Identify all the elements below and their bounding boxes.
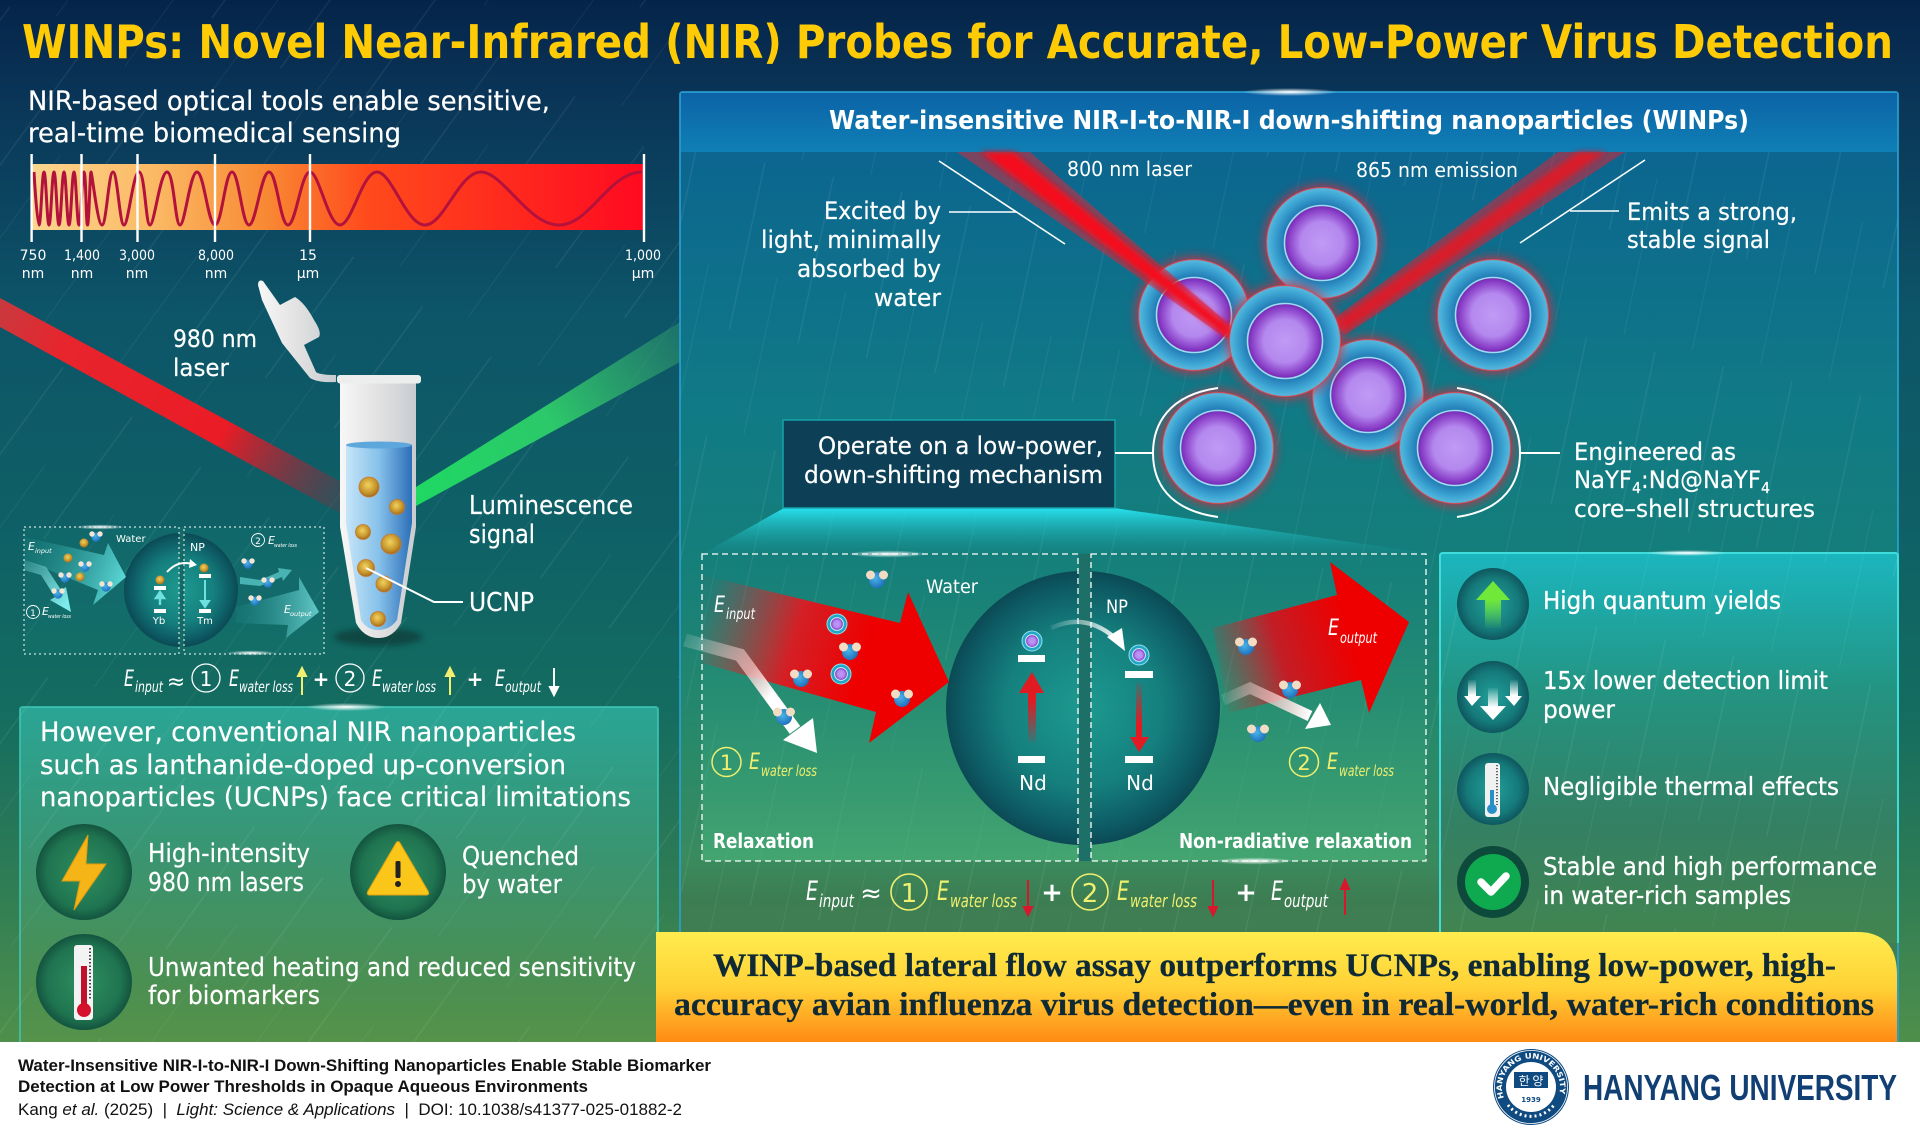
equation: WINP: E: [1271, 876, 1283, 907]
box captions: Non-radiative relaxation: [1179, 829, 1412, 853]
callout box: low-power mechanism: down-shifting mechanism: [804, 461, 1103, 489]
equation: UCNP: 2: [344, 667, 356, 691]
inset: UCNP energy diagram: E: [28, 540, 35, 553]
text: stable performance: in water-rich samples: [1543, 881, 1791, 910]
callout: core-shell structure: NaYF: [1574, 466, 1635, 494]
left intro heading: real-time biomedical sensing: [28, 118, 401, 149]
callout: excited by light: water: [874, 284, 941, 312]
high-intensity lasers text: 980 nm lasers: [148, 868, 304, 898]
citation: Kang et al. (2025) | Light: Science & Applications | DOI: 10.1038/s41377-025-01882-2: [18, 1101, 682, 1119]
equation: UCNP: E: [372, 667, 382, 692]
spectrum bar chart: nm: [126, 266, 148, 282]
callout: emits signal: Emits a strong,: [1627, 198, 1797, 226]
equation: UCNP: E: [124, 667, 134, 692]
heating text: for biomarkers: [148, 981, 320, 1011]
labels in diagram: [926, 576, 1154, 795]
luminescence and UCNP labels: UCNP: [469, 588, 534, 618]
equation: UCNP: E: [229, 667, 239, 692]
E input label: [714, 593, 756, 623]
box captions: [713, 829, 1412, 853]
spectrum bar chart: µm: [632, 266, 654, 282]
equation: WINP: output: [1284, 891, 1329, 912]
arrow: output energy: [1213, 562, 1409, 713]
water loss label 1: [712, 748, 817, 780]
inset: UCNP energy diagram: water loss: [274, 543, 297, 549]
citation: Detection at Low Power Thresholds in Opaque Aqueous Environments: [18, 1078, 588, 1096]
E output label: E: [1328, 616, 1339, 641]
panel heading: [40, 717, 631, 813]
energy levels: [1018, 655, 1153, 763]
inset: UCNP energy diagram: E: [268, 534, 275, 547]
text: quantum yields: High quantum yields: [1543, 586, 1781, 615]
microcentrifuge tube: [258, 280, 422, 646]
quenched by water text: [462, 842, 579, 900]
panel header: [681, 93, 1897, 152]
spectrum bar chart: nm: [71, 266, 93, 282]
inset: UCNP energy diagram: Tm: [196, 616, 213, 627]
laser wavelength labels: 800 nm laser: [1067, 157, 1193, 181]
panel heading: nanoparticles (UCNPs) face critical limitations: [40, 782, 631, 813]
equation: UCNP: input: [135, 678, 164, 696]
quenched by water text: by water: [462, 870, 562, 900]
callout: excited by light: light, minimally: [761, 226, 941, 254]
callout: excited by light: [761, 197, 941, 312]
university seal: 한 양: [1519, 1072, 1543, 1089]
icon: lightning bolt: [36, 824, 132, 920]
labels in diagram: NP: [1106, 596, 1128, 618]
labels in diagram: Nd: [1019, 771, 1047, 795]
non-radiative box background: [1091, 554, 1426, 861]
spectrum bar chart: 1,000: [625, 248, 661, 264]
water loss label 2: 2: [1297, 751, 1311, 775]
arrow: excitation up: [1019, 672, 1044, 742]
equation: WINP: E: [937, 876, 949, 907]
equation: UCNP: 1: [200, 667, 212, 691]
callout: excited by light: absorbed by: [797, 255, 941, 283]
callout: emits signal: [1627, 198, 1797, 254]
equation: WINP: water loss: [950, 891, 1017, 912]
spectrum bar chart: 1,400: [64, 248, 100, 264]
inset: UCNP energy diagram: water loss: [48, 614, 71, 620]
dashed frames: [702, 554, 1426, 861]
arrow: water loss 2: [1223, 688, 1331, 729]
water loss label 1: E: [749, 750, 760, 775]
E output label: [1328, 616, 1378, 647]
water loss label 2: water loss: [1339, 762, 1394, 780]
arrow: water loss 1: [685, 640, 817, 753]
laser beam: emission: [1332, 152, 1625, 335]
WINP energy diagram: [685, 554, 1426, 861]
icon: down arrows: [1457, 661, 1529, 733]
panel header: Water-insensitive NIR-I-to-NIR-I down-shifting nanoparticles (WINPs): [829, 106, 1749, 136]
spectrum bar chart: 15: [299, 248, 317, 264]
laser wavelength labels: [1067, 157, 1518, 182]
university seal: [1493, 1049, 1569, 1125]
text: stable performance: Stable and high performance: [1543, 852, 1877, 881]
spectrum bar chart: 8,000: [198, 248, 234, 264]
heating text: Unwanted heating and reduced sensitivity: [148, 953, 636, 983]
nanoparticle sphere: [946, 571, 1220, 845]
spectrum bar chart: 3,000: [119, 248, 155, 264]
panel: conventional nanoparticle limitations: [20, 707, 658, 1042]
callout lines: excitation and emission: [939, 160, 1645, 244]
inset: UCNP energy diagram: 2: [255, 537, 261, 547]
arrow: input energy: [702, 575, 949, 743]
panel: WINP advantages: [1440, 553, 1898, 943]
equation: UCNP: water loss: [382, 678, 436, 696]
equation: UCNP: output: [505, 678, 542, 696]
inset: UCNP energy diagram: [24, 527, 324, 654]
water loss label 1: 1: [720, 751, 733, 775]
equation: UCNP: ≈: [167, 670, 185, 695]
luminescence and UCNP labels: Luminescence: [469, 491, 633, 521]
high-intensity lasers text: [148, 839, 310, 898]
equation: WINP: E: [1117, 876, 1129, 907]
icon: warning triangle: [350, 824, 446, 920]
text: thermal effects: Negligible thermal effects: [1543, 772, 1839, 801]
icon: thermometer hot: [36, 934, 132, 1030]
equation: WINP: input: [819, 891, 855, 912]
inset: UCNP energy diagram: Water: [116, 534, 146, 545]
equation: WINP: ≈: [860, 879, 882, 909]
text: detection limit: 15x lower detection limit: [1543, 666, 1828, 695]
E output label: output: [1340, 629, 1378, 647]
equation: UCNP: [124, 664, 558, 696]
icon: check mark: [1457, 846, 1529, 918]
inset: UCNP energy diagram: input: [35, 547, 52, 555]
inset: UCNP energy diagram: E: [284, 603, 291, 616]
icon: thermometer cool: [1457, 753, 1529, 825]
arrow: energy transfer: [1051, 622, 1125, 651]
zoom wedge: [704, 508, 1426, 553]
spectrum bar chart: 750: [20, 248, 46, 264]
callout: core-shell structure: Engineered as: [1574, 438, 1736, 466]
spectrum bar chart: nm: [22, 266, 44, 282]
equation: WINP: +: [1041, 878, 1063, 908]
water molecules: [773, 570, 1301, 742]
inset: UCNP energy diagram: output: [290, 610, 312, 618]
callout: core-shell structure: core–shell structures: [1574, 495, 1815, 523]
green luminescence beam: [416, 322, 680, 506]
high-intensity lasers text: High-intensity: [148, 839, 310, 869]
spectrum bar chart: µm: [297, 266, 319, 282]
equation: WINP: +: [1235, 878, 1257, 908]
conclusion banner: accuracy avian influenza virus detection—even in real-world, water-rich conditions: [674, 987, 1874, 1023]
water loss label 2: E: [1327, 750, 1338, 775]
equation: WINP: 2: [1082, 879, 1098, 909]
equation: WINP: E: [806, 876, 818, 907]
heating text: [148, 953, 636, 1011]
red laser beam: [0, 298, 345, 516]
icon: green up arrow: [1457, 568, 1529, 640]
footer: [18, 1049, 1897, 1125]
E input label: E: [714, 593, 725, 618]
callout: core-shell structure: [1574, 438, 1815, 523]
university seal: HANYANG UNIVERSITY: [1496, 1052, 1566, 1099]
equation: UCNP: +: [313, 667, 329, 691]
callout: core-shell structure: 4: [1632, 479, 1641, 497]
laser wavelength labels: 865 nm emission: [1356, 158, 1518, 182]
laser label: 980 nm: [173, 325, 257, 353]
panel: WINPs main: [680, 92, 1898, 1042]
luminescence and UCNP labels: signal: [469, 520, 535, 550]
equation: UCNP: water loss: [239, 678, 293, 696]
left intro heading: [28, 86, 550, 149]
nanoparticle cluster: [957, 152, 1625, 506]
equation: WINP: [806, 874, 1349, 915]
left intro heading: NIR-based optical tools enable sensitive,: [28, 86, 550, 117]
conclusion banner: [656, 932, 1897, 1042]
water loss label 2: [1290, 748, 1394, 780]
labels in diagram: Nd: [1126, 771, 1154, 795]
callout: core-shell structure: :Nd@NaYF: [1641, 466, 1761, 494]
equation: WINP: 1: [901, 879, 917, 909]
spectrum bar chart: nm: [205, 266, 227, 282]
UCNP leader line: [366, 568, 463, 602]
citation: [18, 1057, 712, 1119]
inset: UCNP energy diagram: NP: [190, 541, 205, 554]
spectrum bar chart: [20, 154, 661, 282]
university seal: 1939: [1521, 1096, 1541, 1104]
laser label: laser: [173, 354, 229, 382]
laser label: [173, 325, 257, 382]
E input label: input: [726, 605, 756, 623]
callout box: low-power mechanism: [783, 420, 1115, 508]
quenched by water text: Quenched: [462, 842, 579, 872]
callout box: low-power mechanism: Operate on a low-power,: [818, 432, 1103, 460]
small nanoparticles: [827, 614, 1149, 684]
luminescence and UCNP labels: [469, 491, 633, 618]
citation: Water-Insensitive NIR-I-to-NIR-I Down-Shifting Nanoparticles Enable Stable Biomarker: [18, 1057, 712, 1075]
inset: UCNP energy diagram: E: [42, 605, 49, 618]
panel heading: However, conventional NIR nanoparticles: [40, 717, 576, 748]
box captions: Relaxation: [713, 829, 814, 853]
callout: core-shell structure: 4: [1761, 479, 1770, 497]
callout: excited by light: Excited by: [824, 197, 941, 225]
labels in diagram: Water: [926, 576, 978, 598]
equation: UCNP: +: [467, 667, 483, 691]
inset: UCNP energy diagram: Yb: [152, 616, 165, 627]
divider: [1079, 554, 1091, 861]
equation: UCNP: E: [495, 667, 505, 692]
water loss label 1: water loss: [761, 762, 817, 780]
conclusion banner: WINP-based lateral flow assay outperforms UCNPs, enabling low-power, high-: [713, 948, 1836, 984]
laser beam: excitation: [957, 152, 1238, 338]
glints: [75, 88, 1727, 864]
text: stable performance: [1543, 852, 1877, 910]
relaxation box background: [702, 554, 1078, 861]
inset: UCNP energy diagram: 1: [30, 609, 36, 619]
equation: WINP: water loss: [1130, 891, 1197, 912]
callout: emits signal: stable signal: [1627, 226, 1770, 254]
bracket arcs and leaders: [1115, 388, 1560, 517]
panel heading: such as lanthanide-doped up-conversion: [40, 750, 566, 781]
text: detection limit: power: [1543, 695, 1616, 724]
arrow: relaxation down: [1130, 683, 1149, 752]
text: detection limit: [1543, 666, 1828, 724]
